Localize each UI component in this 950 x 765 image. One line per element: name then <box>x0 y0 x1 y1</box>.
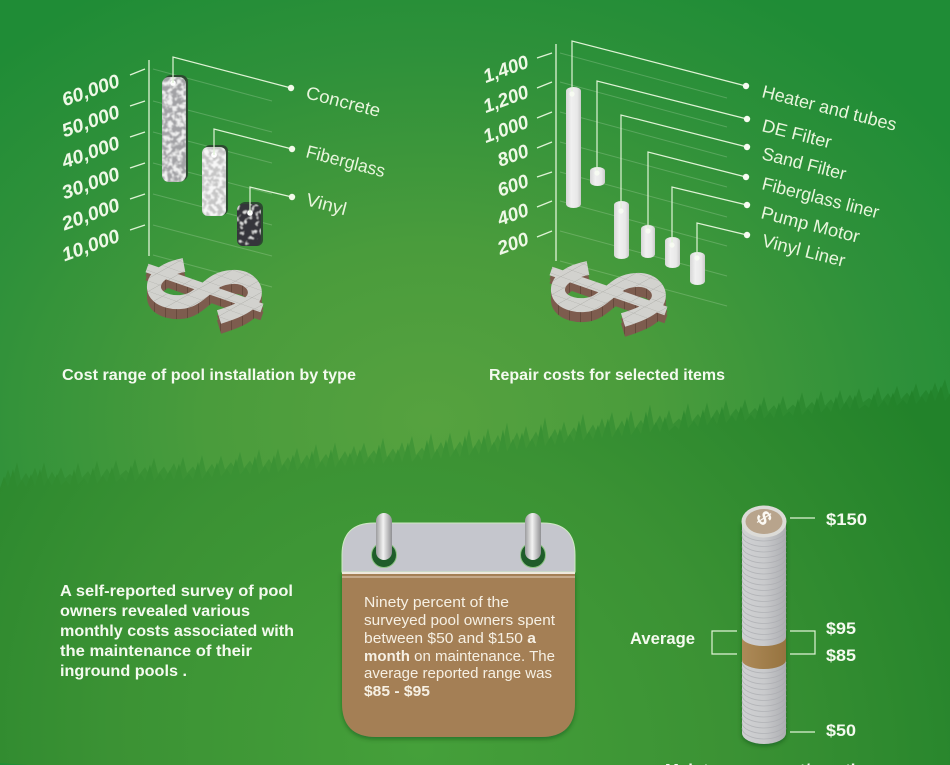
top coin <box>742 506 786 538</box>
value labels: $85 <box>826 646 856 665</box>
left chart axis values <box>58 71 123 266</box>
survey paragraph: monthly costs associated with <box>60 623 294 640</box>
left chart axis values: 60,000 <box>59 71 123 111</box>
label: pump motor: Pump Motor <box>759 202 862 247</box>
right chart axis values: 200 <box>494 229 532 260</box>
top coin: $ <box>751 507 776 530</box>
right chart axis values: 1,400 <box>480 52 532 88</box>
survey paragraph: A self-reported survey of pool <box>60 583 293 600</box>
calendar text: surveyed pool owners spent <box>364 613 555 629</box>
value lines <box>712 518 815 732</box>
left chart axis values: 10,000 <box>59 226 123 266</box>
coin stack chart <box>630 506 867 765</box>
left chart axis values: 20,000 <box>58 195 123 236</box>
survey paragraph: the maintenance of their <box>60 643 252 660</box>
average band <box>742 637 786 669</box>
leader dots <box>569 83 750 261</box>
leader dots <box>288 85 295 200</box>
leader lines <box>173 57 292 213</box>
right chart axis values: 1,000 <box>480 112 532 148</box>
survey paragraph <box>60 583 294 680</box>
left chart caption: Cost range of pool installation by type <box>62 367 356 384</box>
right chart axis values: 800 <box>495 141 532 172</box>
calendar card <box>342 513 575 737</box>
label: heater and tubes: Heater and tubes <box>760 81 899 135</box>
label: fiberglass liner: Fiberglass liner <box>760 173 881 222</box>
value labels: $150 <box>826 510 867 529</box>
value labels: $95 <box>826 619 856 638</box>
icon: stone dollar sign <box>147 265 262 327</box>
right chart caption: Repair costs for selected items <box>489 367 725 384</box>
calendar text: month on maintenance. The <box>364 649 555 665</box>
label: DE filter: DE Filter <box>760 115 834 152</box>
coin stack body <box>742 522 786 744</box>
right chart axis values: 1,200 <box>480 82 532 118</box>
coin edges <box>742 530 786 739</box>
right chart: repair costs <box>480 41 899 384</box>
icon: stone dollar sign <box>551 268 666 330</box>
calendar ring right <box>520 513 546 568</box>
average label: Average <box>630 630 695 648</box>
bar: vinyl <box>237 202 263 246</box>
bars: repair items <box>566 87 705 285</box>
label: vinyl liner: Vinyl Liner <box>760 230 847 271</box>
left chart axis and ticks <box>130 60 149 256</box>
calendar text: average reported range was <box>364 666 552 682</box>
survey paragraph: inground pools . <box>60 663 187 680</box>
value labels <box>826 510 867 740</box>
label: vinyl: Vinyl <box>304 190 349 219</box>
right chart axis and ticks <box>537 44 556 261</box>
left chart axis values: 50,000 <box>59 102 123 142</box>
right chart grid lines <box>560 53 727 306</box>
value labels: $50 <box>826 721 856 740</box>
left chart axis values: 40,000 <box>58 133 123 174</box>
background: grass hillside <box>0 313 950 765</box>
bar: concrete <box>162 75 188 182</box>
calendar text <box>364 595 555 700</box>
label: sand filter: Sand Filter <box>760 143 848 184</box>
calendar text: between $50 and $150 a <box>364 631 537 647</box>
right chart axis values: 600 <box>495 171 532 202</box>
leader lines <box>572 41 747 258</box>
survey paragraph: owners revealed various <box>60 603 250 620</box>
left chart: installation cost by pool type <box>58 57 387 384</box>
calendar text: Ninety percent of the <box>364 595 509 611</box>
left chart grid lines <box>153 69 272 287</box>
right chart axis values: 400 <box>494 200 532 231</box>
calendar text: $85 - $95 <box>364 684 430 700</box>
calendar header <box>342 523 575 572</box>
label: concrete: Concrete <box>304 83 383 121</box>
calendar body <box>342 572 575 737</box>
calendar ring left <box>372 513 396 568</box>
bar: fiberglass <box>202 145 228 216</box>
label: fiberglass: Fiberglass <box>304 142 387 181</box>
right chart axis values <box>480 52 532 260</box>
left chart axis values: 30,000 <box>59 164 123 204</box>
